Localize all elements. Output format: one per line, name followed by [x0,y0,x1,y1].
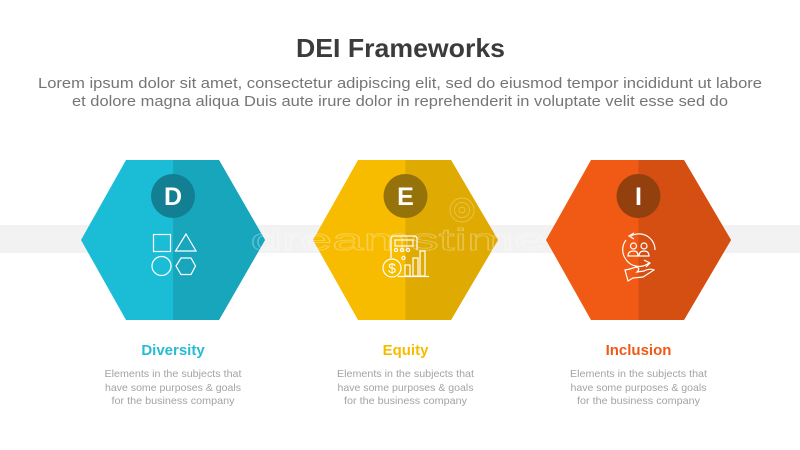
badge: I: I [635,183,642,211]
badge: D [151,174,195,218]
icon: shapes [152,234,196,276]
description: equity [337,368,474,407]
label: inclusion [570,342,707,407]
panel: inclusion hexagon [546,160,731,320]
description: inclusion: for the business company [577,395,701,407]
watermark: dreamstime [250,222,546,257]
label: equity: Equity [383,342,429,359]
background band [0,225,800,253]
badge: D: D [164,183,182,211]
description: inclusion: have some purposes & goals [570,382,706,394]
description: inclusion: Elements in the subjects that [570,368,707,380]
intro text: Lorem ipsum dolor sit amet, consectetur adipiscing elit, sed do eiusmod tempor incididunt ut labore [38,75,762,92]
intro text [38,75,762,110]
description: equity: have some purposes & goals [338,382,474,394]
label: diversity: Diversity [141,342,205,359]
label: equity [337,342,474,407]
badge: E [384,174,428,218]
label: inclusion: Inclusion [606,342,671,359]
label: diversity [104,342,242,407]
intro text: et dolore magna aliqua Duis aute irure dolor in reprehenderit in voluptate velit esse sed do [72,93,728,110]
watermark [250,198,546,257]
description: equity: Elements in the subjects that [337,368,474,380]
title: DEI Frameworks [296,33,505,63]
badge: E: E [397,183,414,211]
description: diversity: for the business company [112,395,235,407]
description: diversity [104,368,242,407]
icon: calculator and chart [383,236,429,277]
badge: I [616,174,660,218]
icon: people in cycle over hand [623,233,655,281]
description: inclusion [570,368,707,407]
panel: diversity hexagon [81,160,265,320]
description: diversity: Elements in the subjects that [104,368,242,380]
description: diversity: have some purposes & goals [105,382,241,394]
description: equity: for the business company [344,395,468,407]
icon: calculator and chart: $ [388,260,396,276]
panel: equity hexagon [313,160,498,320]
